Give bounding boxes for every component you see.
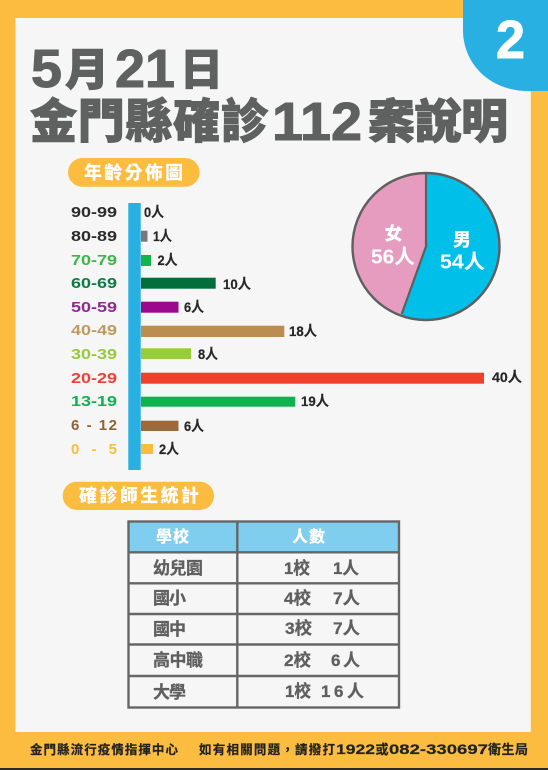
pie chart: gender: 男: [453, 226, 471, 252]
age labels: 60-69: [71, 275, 117, 292]
row: university: [153, 681, 364, 702]
age labels: 50-59: [71, 299, 117, 316]
footer: 金門縣流行疫情指揮中心: [30, 742, 178, 757]
value labels: 6人: [184, 418, 204, 434]
title: 21: [115, 39, 175, 99]
row: senior high and vocational: [153, 650, 360, 670]
title: 112: [272, 92, 362, 152]
table: confirmed cases by school: 人數: [292, 523, 325, 547]
heading pill: age distribution: 年齡分佈圖: [84, 159, 183, 185]
corner badge: page number 2: 2: [496, 10, 525, 70]
row: junior high: 7人: [333, 619, 360, 638]
value labels: [144, 204, 522, 457]
title: 案說明: [368, 83, 508, 152]
footer: 或: [376, 742, 389, 757]
table grid: [128, 522, 399, 708]
row: kindergarten: [153, 558, 359, 578]
pie chart: gender: [352, 173, 500, 320]
axis: [128, 203, 141, 470]
age labels: 13-19: [71, 393, 117, 410]
value labels: 18人: [289, 323, 317, 339]
row: senior high and vocational: 高中職: [153, 650, 203, 670]
row: kindergarten: 1人: [333, 559, 359, 578]
pie chart: gender: 56人: [371, 246, 415, 268]
value labels: 6人: [184, 299, 204, 315]
value labels: 40人: [492, 369, 522, 385]
age labels: 90-99: [71, 204, 117, 221]
pie chart: gender: 54人: [440, 252, 485, 274]
title: 日: [180, 36, 223, 98]
age labels: 0 - 5: [71, 441, 117, 458]
row: junior high: 3校: [285, 618, 312, 638]
footer: 如有相關問題，請撥打: [199, 742, 335, 757]
row: junior high: [153, 618, 360, 639]
row: elementary school: 7人: [333, 589, 360, 608]
title: 5: [31, 39, 62, 99]
age labels: 40-49: [71, 322, 117, 339]
age labels: [71, 204, 117, 458]
row: senior high and vocational: 2校: [284, 650, 311, 670]
footer: 衛生局: [488, 742, 528, 757]
footer: [30, 741, 528, 757]
bars: [141, 231, 484, 454]
value labels: 1人: [153, 228, 172, 244]
table header fill: [128, 521, 400, 552]
title: 月: [65, 34, 109, 98]
value labels: 19人: [301, 393, 329, 409]
header text: 學校: [156, 523, 189, 547]
row: elementary school: 國小: [153, 589, 186, 608]
heading pill: teacher and student statistics: 確診師生統計: [79, 482, 199, 508]
corner badge: page number 2: [463, 0, 548, 91]
table: confirmed cases by school: [128, 521, 400, 708]
value labels: 2人: [158, 252, 178, 268]
age labels: 80-89: [71, 228, 117, 245]
value labels: 10人: [223, 276, 251, 292]
value labels: 8人: [198, 346, 218, 362]
age labels: 70-79: [71, 252, 117, 269]
age labels: 30-39: [71, 346, 117, 363]
age labels: 20-29: [71, 370, 117, 387]
row: elementary school: 4校: [284, 588, 311, 608]
title: [30, 34, 508, 152]
pie chart: gender: 女: [384, 220, 402, 246]
row: university: 大學: [153, 683, 186, 702]
row: senior high and vocational: 6人: [331, 651, 360, 670]
age labels: 6 - 12: [71, 417, 117, 434]
row: junior high: 國中: [153, 620, 186, 639]
footer: 082-330697: [389, 741, 488, 757]
heading pill: age distribution: [68, 158, 200, 187]
row: kindergarten: 幼兒園: [153, 559, 203, 578]
row: university: 1校: [285, 681, 311, 701]
bar chart: age distribution: [71, 203, 522, 470]
title: 金門縣確診: [30, 83, 268, 152]
row: kindergarten: 1校: [284, 558, 310, 578]
value labels: 0人: [144, 204, 164, 220]
row: elementary school: [153, 588, 360, 608]
footer: 1922: [336, 741, 375, 757]
value labels: 2人: [159, 441, 179, 457]
row: university: 16人: [321, 682, 364, 701]
